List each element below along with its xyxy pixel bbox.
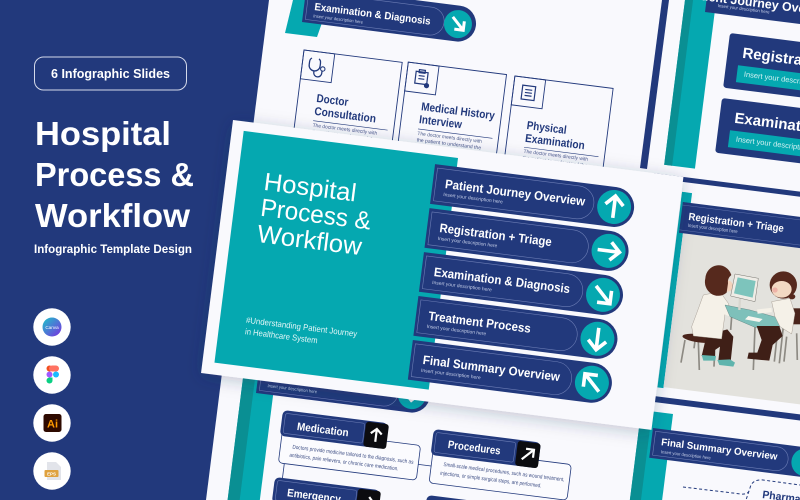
main title: Process & (259, 194, 373, 236)
main title: Hospital (262, 168, 358, 207)
subheading: Infographic Template Design (34, 244, 192, 256)
card: doctor consultation: The doctor meets directly with (312, 123, 378, 137)
heading: Process & (35, 156, 194, 193)
card: procedures: Procedures (447, 439, 501, 458)
heading (35, 115, 194, 234)
heading: Hospital (35, 115, 171, 152)
card: procedures: injections, or simple surgical steps, are performed. (440, 471, 542, 489)
card: doctor consultation (290, 50, 402, 172)
card: lower right header (424, 495, 534, 500)
panel: bottom right slide (628, 410, 800, 500)
cards: examination steps (290, 49, 613, 198)
connectors (282, 448, 434, 499)
card: medical history interview: the patient to understand the (416, 137, 482, 151)
banner: final summary overview: Final Summary Overview (661, 437, 778, 463)
left person (692, 265, 738, 367)
banner: final summary overview (649, 428, 800, 479)
panel: main contents slide (201, 120, 683, 430)
icon: canva: Canva (45, 325, 59, 330)
box: registration (723, 33, 800, 115)
card: emergency (272, 477, 381, 500)
card: medication: Medication (296, 421, 350, 439)
slide base: Registration + Triage (688, 211, 785, 235)
left stool (681, 332, 715, 370)
badge: 6 infographic slides: 6 Infographic Slides (51, 67, 170, 81)
card: medication (276, 410, 423, 480)
desk and monitor (725, 274, 788, 370)
banner: patient journey overview (684, 0, 800, 37)
panel: bottom treatment slide (227, 357, 574, 500)
card: physical examination (501, 76, 613, 198)
row: registration triage (424, 208, 631, 273)
white slide area behind (206, 0, 800, 500)
row: registration triage: Registration + Triage (439, 221, 553, 249)
icon: illustrator: Ai (47, 418, 58, 430)
slide base: Insert your description here (688, 223, 738, 235)
dashed connector (683, 480, 800, 500)
main title: Workflow (256, 220, 364, 261)
hashtag subtitle: #Understanding Patient Journey (245, 315, 358, 339)
teal side band (227, 368, 276, 500)
row: treatment process: Insert your description here (426, 324, 487, 337)
banner: patient journey overview: Insert your description here (718, 3, 770, 15)
card: physical examination: The doctor meets directly with (523, 149, 589, 163)
treatment cards (274, 410, 574, 500)
icon: eps: EPS (47, 472, 56, 476)
panel: top right slide (664, 0, 800, 180)
banner: examination and diagnosis: Insert your description here (313, 13, 364, 25)
teal side band (628, 410, 673, 500)
card: medication: antibiotics, pain relievers, or chronic care medication. (289, 453, 399, 472)
row: treatment process: Treatment Process (428, 309, 532, 336)
banner: examination and diagnosis: Examination & Diagnosis (314, 1, 431, 28)
banner: examination and diagnosis (302, 0, 478, 44)
box: examination (715, 98, 800, 180)
row: examination diagnosis (419, 252, 625, 317)
illustration: doctor and patient at desk (681, 265, 800, 370)
row: examination diagnosis: Examination & Diagnosis (433, 265, 571, 296)
row: examination diagnosis: Insert your description here (432, 280, 492, 293)
badge: 6 infographic slides (34, 57, 186, 90)
card: doctor consultation: Doctor (316, 93, 349, 109)
card: medical history interview: Medical History (421, 101, 496, 122)
row: final summary overview: Insert your description here (421, 368, 481, 381)
hashtag subtitle (244, 315, 358, 350)
row: patient journey overview: Patient Journey Overview (444, 177, 586, 209)
right person (747, 271, 800, 362)
icon: eps (33, 452, 71, 490)
card: physical examination: Physical (526, 120, 567, 137)
icon: canva (33, 308, 71, 346)
slide background (201, 120, 683, 430)
icon: figma (33, 356, 71, 394)
card: procedures: Small-scale medical procedures, such as wound treatment, (443, 462, 565, 483)
right navy stripe (640, 0, 669, 169)
card: medical history interview (395, 62, 507, 184)
card: medication: Doctors provide medicine tailored to the diagnosis, such as (292, 444, 414, 466)
panel: registration triage slide (625, 166, 800, 429)
banner: final summary overview: Insert your description here (661, 449, 711, 461)
card: medical history interview: The doctor meets directly with (417, 131, 482, 145)
teal side band (664, 0, 721, 169)
slide base (625, 166, 800, 429)
panel: top slide examination and diagnosis (285, 0, 669, 198)
icon: illustrator (33, 404, 71, 442)
card: physical examination: Examination (524, 133, 585, 152)
card: medical history interview: Interview (418, 114, 463, 131)
card: doctor consultation: Consultation (314, 106, 377, 126)
row: final summary overview (408, 340, 614, 405)
left panel: cover text (33, 57, 194, 490)
card: doctor consultation: the patient to understand the (311, 129, 377, 143)
row: patient journey overview: Insert your description here (443, 192, 504, 205)
row: patient journey overview (430, 164, 636, 229)
card: physical examination: the patient to understand the (522, 155, 588, 169)
banner: treatment process (256, 357, 432, 415)
card: procedures (427, 429, 574, 500)
banner: treatment process: Insert your description here (267, 383, 318, 394)
row: treatment process (413, 296, 620, 361)
main title (256, 168, 376, 262)
teal title panel (214, 131, 458, 390)
hashtag subtitle: in Healthcare System (245, 326, 318, 345)
heading: Workflow (35, 197, 190, 234)
row: final summary overview: Final Summary Overview (422, 353, 561, 384)
row: registration triage: Insert your description here (437, 236, 498, 249)
teal corner block (285, 0, 330, 37)
